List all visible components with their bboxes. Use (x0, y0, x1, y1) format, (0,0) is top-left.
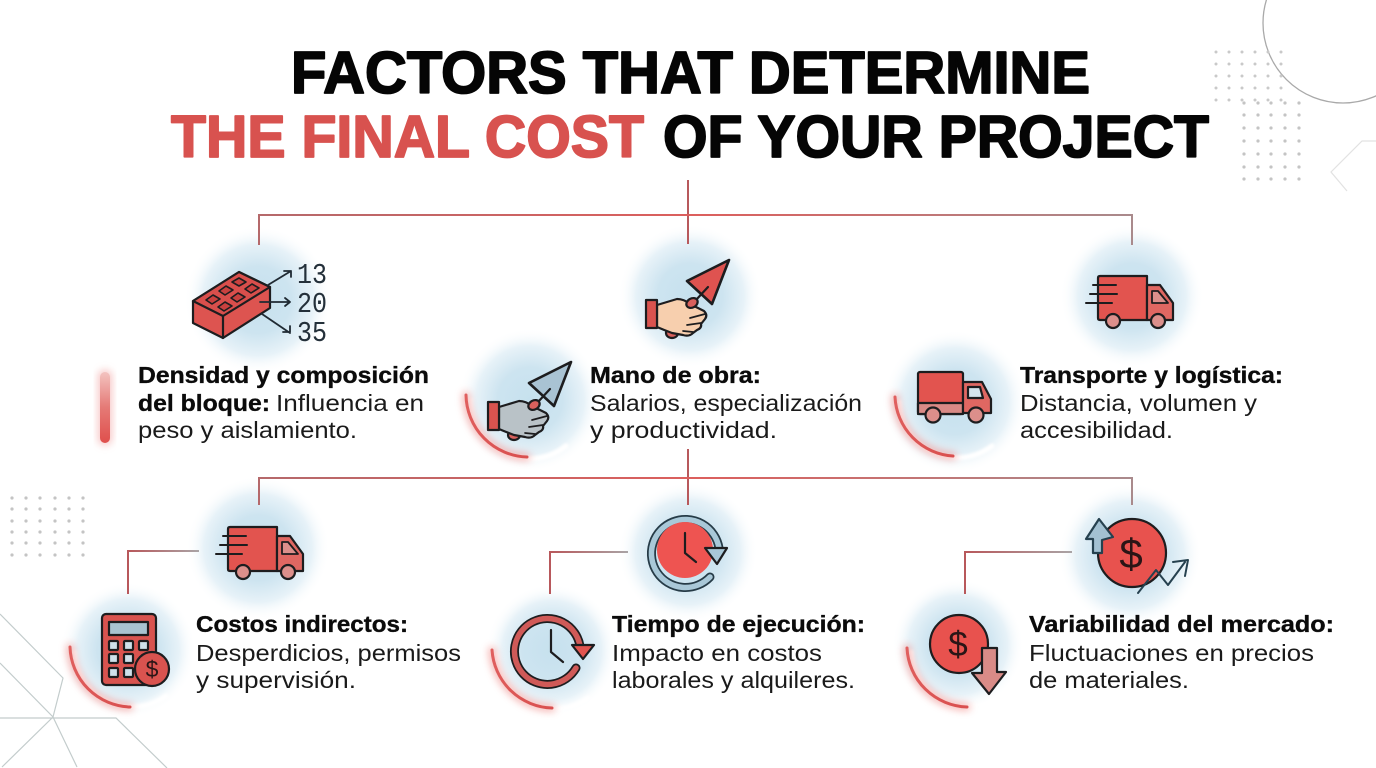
text: execution time (612, 611, 865, 693)
text: labour: Salarios, especialización (590, 390, 862, 416)
decoration: bottom left dots and geometric lines (0, 496, 167, 768)
icon: dollar coin with market arrows (1086, 519, 1188, 593)
text: block density: Densidad y composición (138, 362, 429, 388)
title: OF YOUR PROJECT (663, 104, 1209, 170)
text: transport: Distancia, volumen y (1020, 390, 1257, 416)
icon: fast truck bottom left (216, 527, 303, 579)
icon: red trowel in hand (646, 260, 729, 338)
text: indirect costs (196, 611, 461, 693)
text: block density: Influencia en (276, 390, 424, 416)
icon: fast truck top right (1086, 276, 1173, 328)
text: transport: Transporte y logística: (1020, 362, 1283, 388)
text: execution time: Impacto en costos (612, 640, 822, 666)
text: block density (138, 362, 429, 443)
icon: calculator with coin (102, 614, 169, 686)
connector: coin to coin (965, 552, 1072, 594)
text: execution time: laborales y alquileres. (612, 667, 855, 693)
icon: delivery truck (918, 372, 991, 422)
icon: brick with density numbers: 20 (297, 288, 327, 321)
glows behind the icons (60, 224, 1204, 718)
text: labour: Mano de obra: (590, 362, 761, 388)
icon: calculator with coin: $ (146, 656, 159, 682)
accent: vertical bar (98, 370, 112, 445)
title (171, 40, 1209, 170)
icon: clock with red arrow (514, 618, 594, 684)
icon: clock with blue arrow (651, 519, 727, 587)
text: execution time: Tiempo de ejecución: (612, 611, 865, 637)
text: indirect costs: Desperdicios, permisos (196, 640, 461, 666)
icon: brick with density numbers (193, 259, 327, 350)
connector tree: bottom row (259, 449, 1132, 505)
connector: clock to clock (550, 552, 628, 594)
text: market variability: de materiales. (1029, 667, 1189, 693)
icon: brick with density numbers: 13 (297, 259, 327, 292)
text: market variability (1029, 611, 1334, 693)
title: FACTORS THAT DETERMINE (291, 40, 1090, 106)
text: market variability: Fluctuaciones en precios (1029, 640, 1314, 666)
icon: dollar coin with market arrows: $ (1119, 530, 1143, 577)
title: THE FINAL COST (171, 104, 644, 170)
text: block density: del bloque: (138, 390, 270, 416)
accent: curved arcs under icons (70, 395, 1003, 709)
text: labour: y productividad. (590, 417, 777, 443)
text: market variability: Variabilidad del mercado: (1029, 611, 1334, 637)
text: indirect costs: y supervisión. (196, 667, 356, 693)
text: indirect costs: Costos indirectos: (196, 611, 408, 637)
text: transport: accesibilidad. (1020, 417, 1173, 443)
text: block density: peso y aislamiento. (138, 417, 357, 443)
connector: truck to calculator (128, 551, 199, 594)
text: labour (590, 362, 862, 443)
icon: dollar coin with down arrow (930, 615, 1006, 694)
icon: grey trowel in hand (488, 362, 571, 440)
decoration: top right circle, dots and polygon (1214, 0, 1376, 191)
icon: dollar coin with down arrow: $ (948, 625, 968, 664)
connector tree: top row (259, 180, 1132, 245)
text: transport (1020, 362, 1283, 443)
icon: brick with density numbers: 35 (297, 317, 327, 350)
